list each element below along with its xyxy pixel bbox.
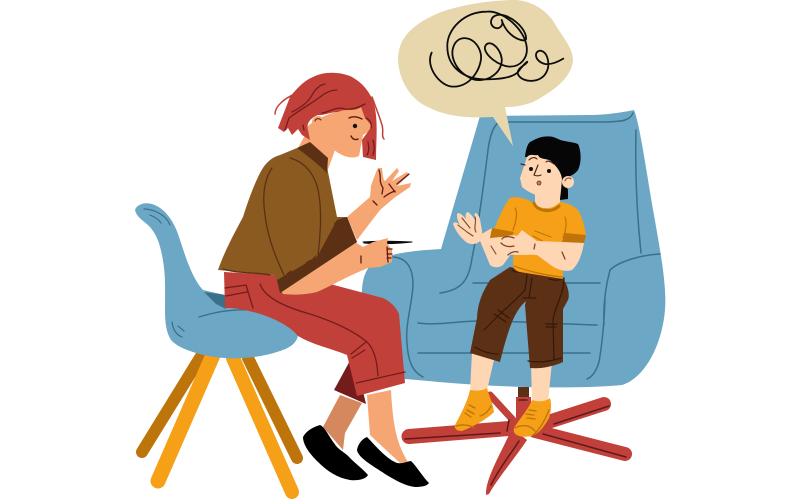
woman neck xyxy=(297,135,335,172)
boy right arm and hand on chest xyxy=(500,230,584,271)
woman raised arm and hand xyxy=(347,168,411,240)
boy shorts xyxy=(470,267,569,368)
boy xyxy=(453,136,586,437)
woman far leg xyxy=(323,395,362,450)
boy neck xyxy=(535,192,560,208)
icon: tangled scribble xyxy=(430,12,563,87)
woman near leg xyxy=(367,390,408,463)
woman trousers xyxy=(224,272,405,396)
woman xyxy=(218,73,429,487)
boy left hand xyxy=(453,212,496,254)
boy face xyxy=(520,150,563,199)
blue armchair xyxy=(362,110,665,387)
boy shoes xyxy=(455,388,551,437)
woman shirt xyxy=(218,142,357,293)
speech bubble xyxy=(398,0,573,146)
chair seat shadow xyxy=(204,292,226,309)
boy t-shirt xyxy=(490,197,586,279)
red swivel base xyxy=(405,387,626,495)
woman shoes xyxy=(303,425,429,487)
boy ear xyxy=(562,176,574,188)
boy hair xyxy=(525,136,581,200)
boy legs xyxy=(470,352,552,402)
woman ear xyxy=(312,116,324,128)
chair shell xyxy=(135,203,298,358)
woman pen xyxy=(363,241,412,244)
boy left forearm xyxy=(478,228,514,267)
woman hair xyxy=(275,73,384,160)
woman far trouser cuff xyxy=(334,357,366,404)
chair legs xyxy=(142,353,297,492)
woman lower arm and hand xyxy=(280,238,392,295)
left blue chair xyxy=(135,203,298,492)
woman face xyxy=(306,105,376,157)
